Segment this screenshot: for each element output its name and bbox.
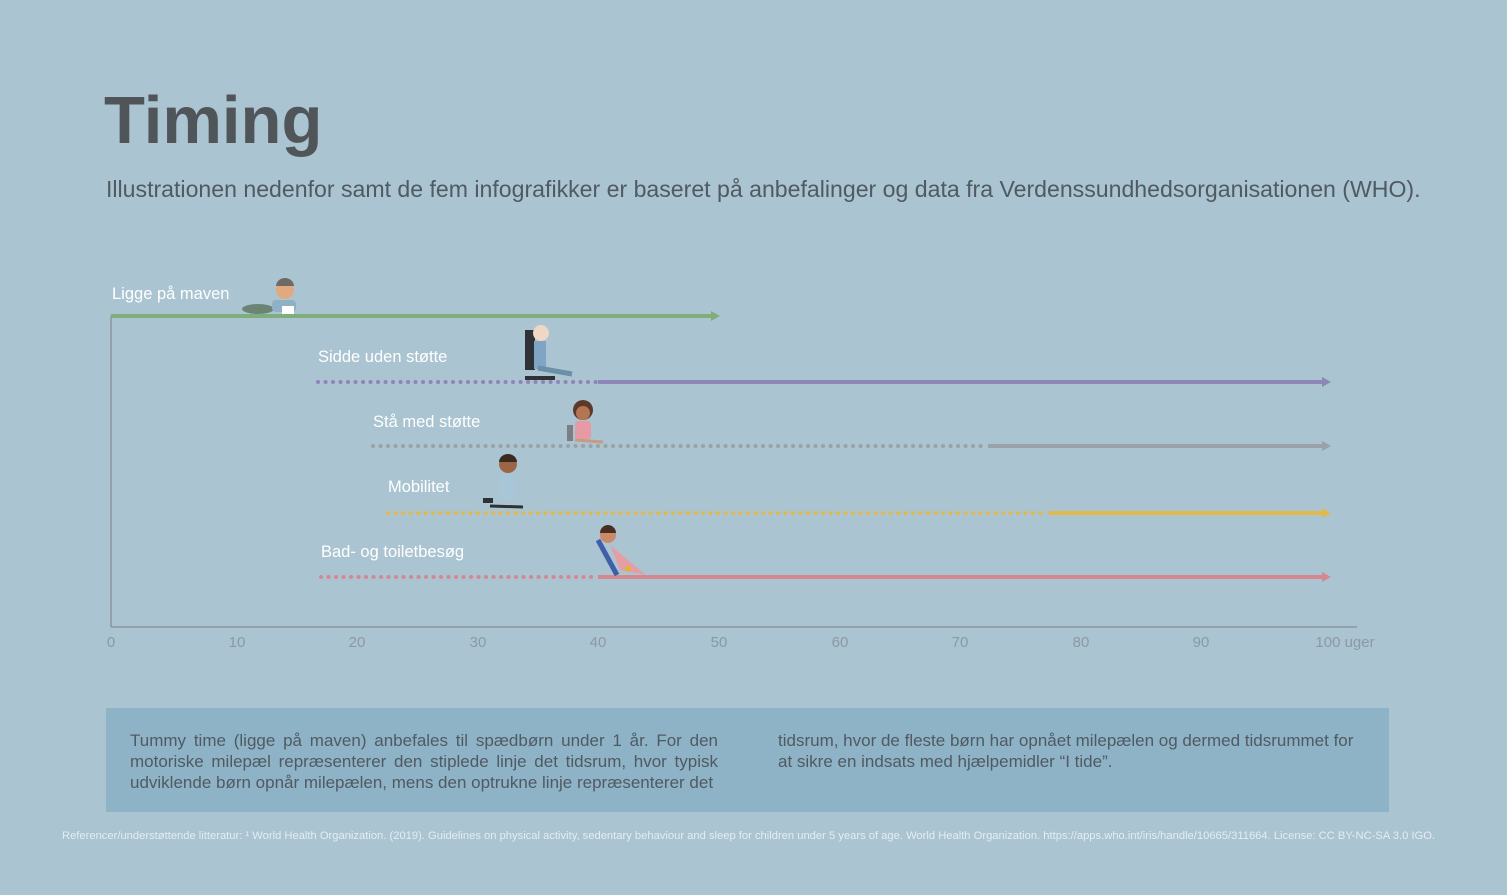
row: bad- og toiletbesøg xyxy=(321,525,1331,582)
x-axis labels: 0 xyxy=(107,634,115,651)
title: Timing xyxy=(104,83,322,158)
x-axis labels: 60 xyxy=(832,634,848,651)
explanation box xyxy=(106,708,1389,812)
subtitle: Illustrationen nedenfor samt de fem infografikker er baseret på anbefalinger og data fra Verdenssundhedsorganisationen (WHO). xyxy=(106,176,1421,202)
text column left: Tummy time (ligge på maven) anbefales til spædbørn under 1 år. For den motoriske milepæl repræsenterer den stiplede linje det tidsrum, hvor typisk udviklende børn opnår milepælen, mens den optrukne linje repræsenterer det xyxy=(130,731,718,792)
x-axis labels: 40 xyxy=(590,634,606,651)
x-axis labels: 20 xyxy=(349,634,365,651)
row: ligge på maven: Ligge på maven xyxy=(112,285,229,303)
x-axis labels: 100 uger xyxy=(1315,634,1375,651)
row: bad- og toiletbesøg: Bad- og toiletbesøg xyxy=(321,543,464,561)
x-axis labels: 50 xyxy=(711,634,727,651)
x-axis labels xyxy=(107,634,1375,651)
row: sidde uden støtte xyxy=(318,325,1331,387)
x-axis labels: 10 xyxy=(229,634,245,651)
row: stå med støtte: Stå med støtte xyxy=(373,413,480,431)
row: mobilitet xyxy=(388,454,1331,518)
x-axis labels: 70 xyxy=(952,634,968,651)
row: ligge på maven xyxy=(111,278,720,321)
row: stå med støtte xyxy=(373,400,1331,451)
x-axis labels: 90 xyxy=(1193,634,1209,651)
references: Referencer/understøttende litteratur: ¹ World Health Organization. (2019). Guidelines on physical activity, sedentary behaviour and sleep for children under 5 years of age. World Health Organization. https://apps.who.int/iris/handle/10665/311664. License: CC BY-NC-SA 3.0 IGO. xyxy=(62,830,1435,842)
row: mobilitet: Mobilitet xyxy=(388,478,450,496)
text column right: tidsrum, hvor de fleste børn har opnået milepælen og dermed tidsrummet for at sikre en indsats med hjælpemidler “I tide”. xyxy=(778,731,1353,771)
x-axis labels: 80 xyxy=(1073,634,1089,651)
row: sidde uden støtte: Sidde uden støtte xyxy=(318,348,447,366)
x-axis labels: 30 xyxy=(470,634,486,651)
